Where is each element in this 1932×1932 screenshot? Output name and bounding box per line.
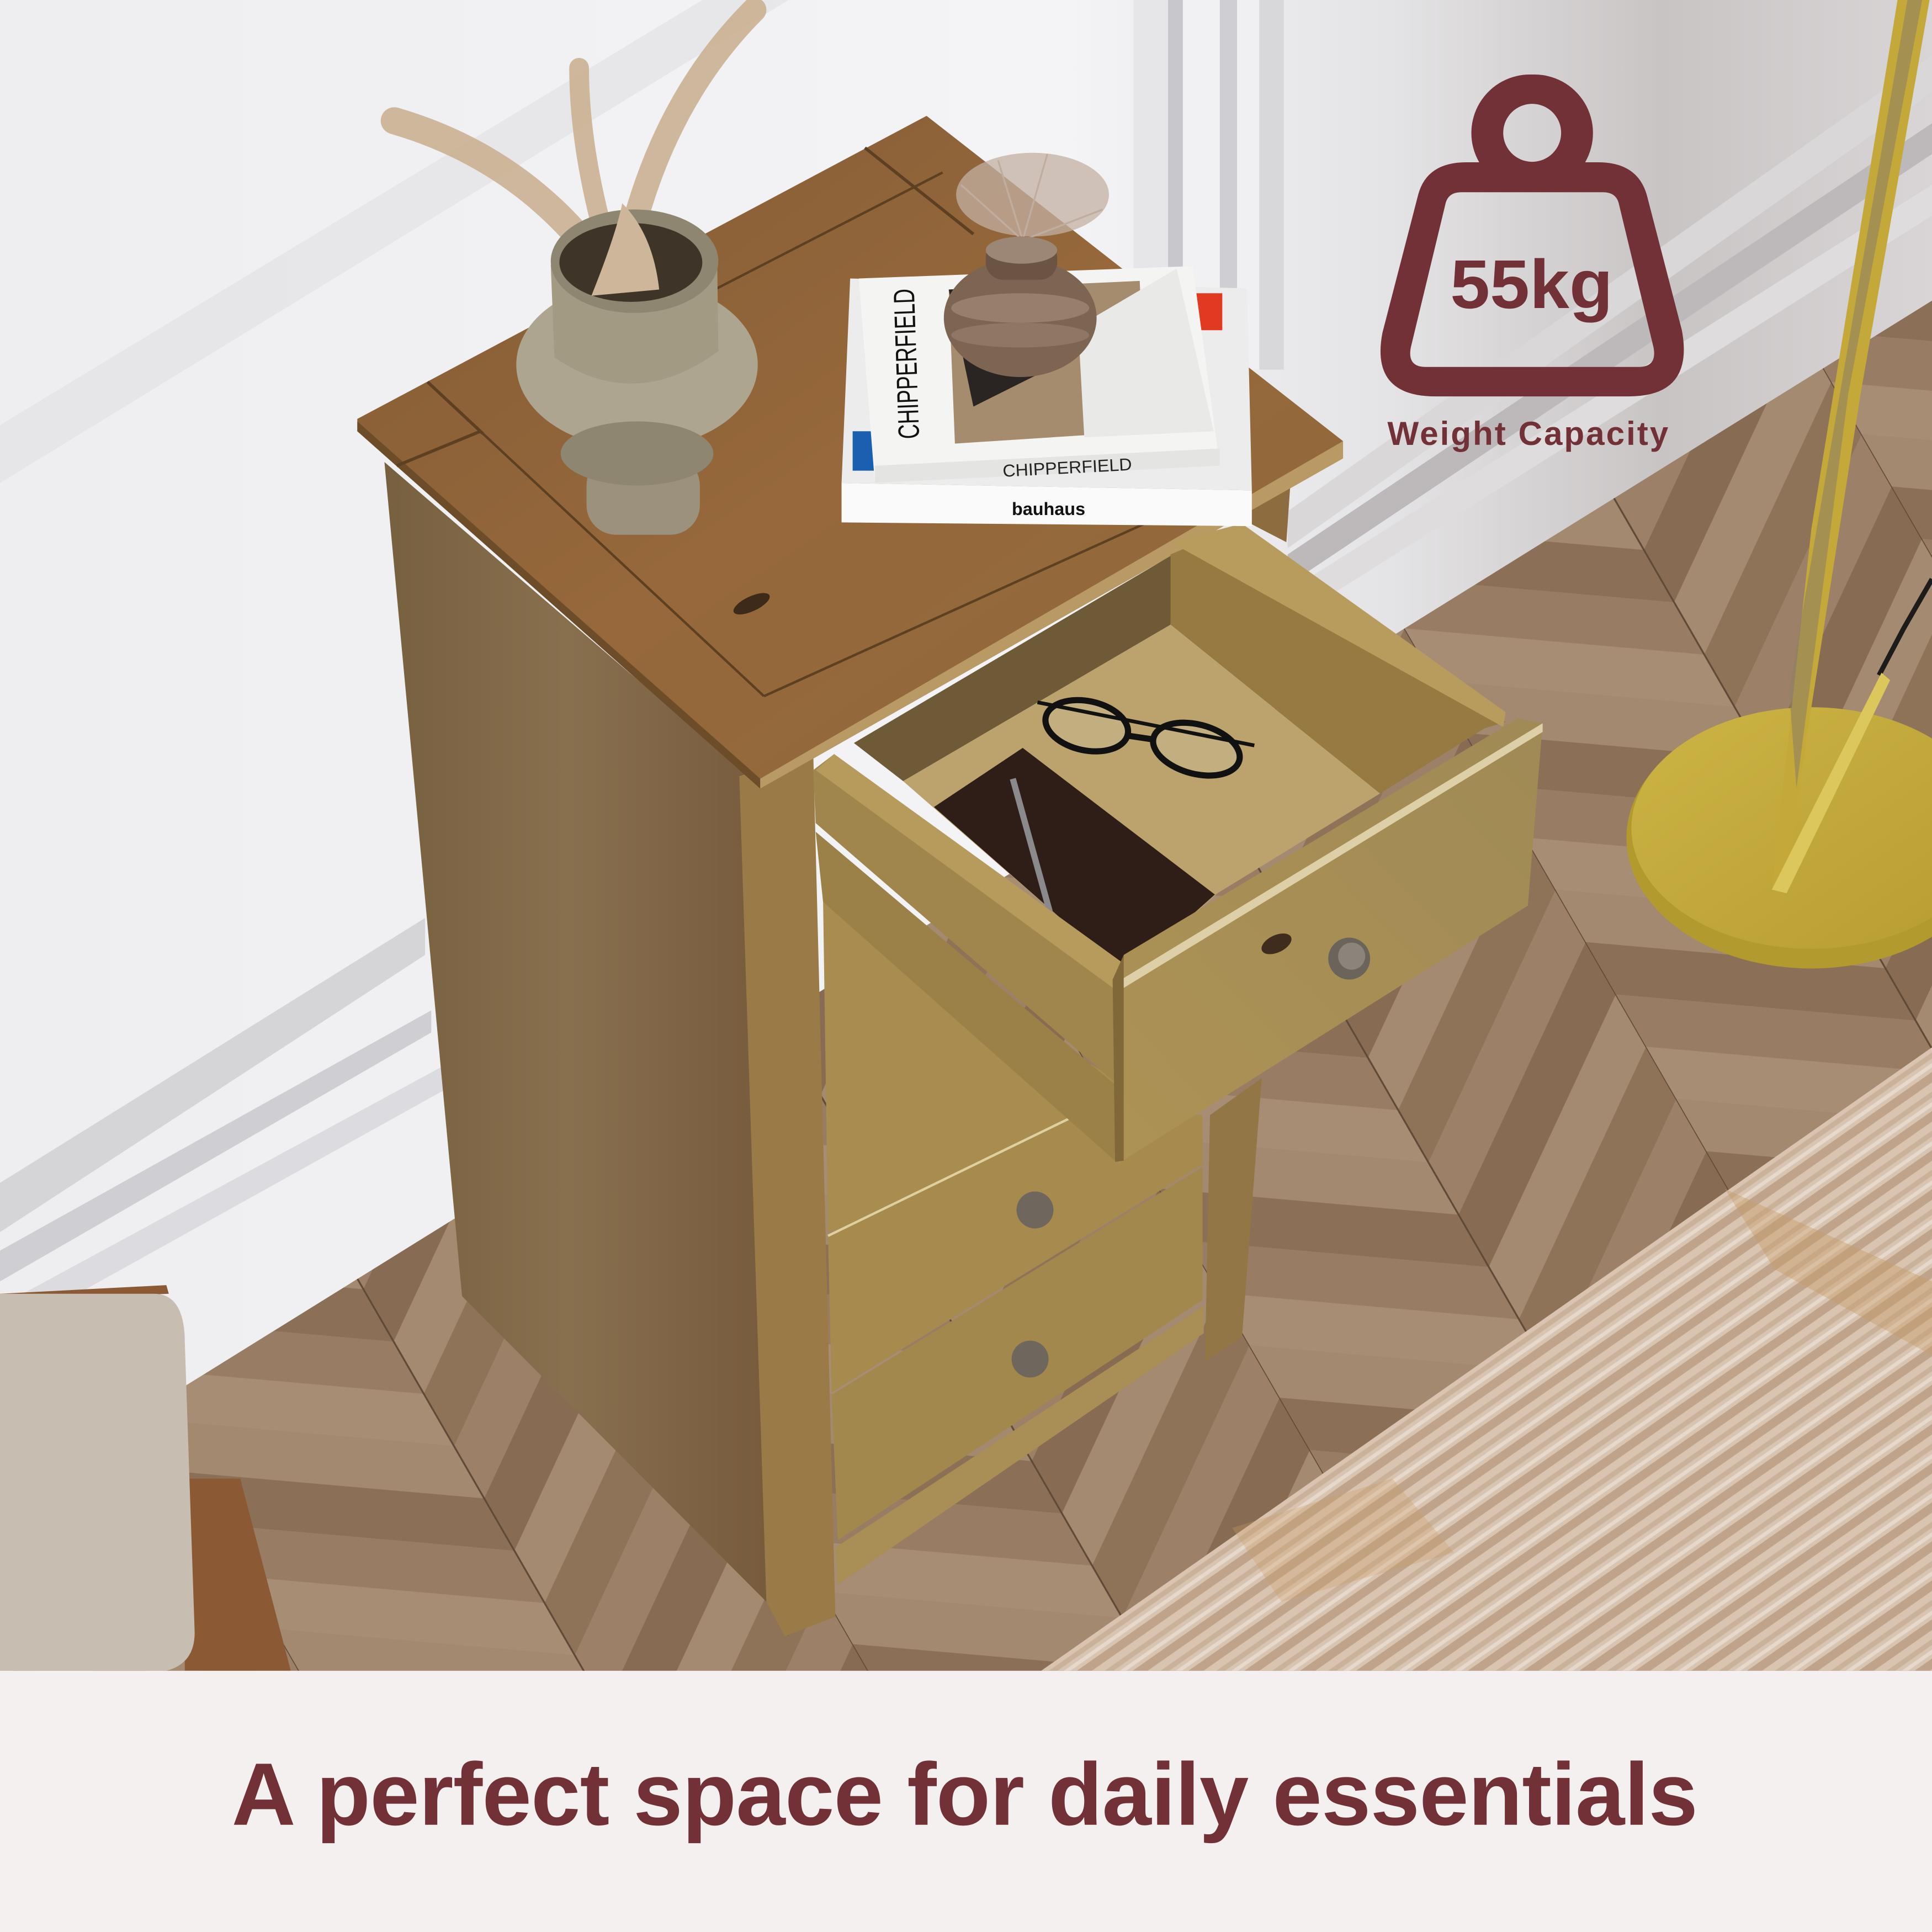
weight label: Weight Capacity bbox=[1387, 415, 1669, 452]
books bbox=[842, 266, 1252, 526]
vase neck bbox=[551, 253, 718, 384]
drawer floor bbox=[903, 625, 1380, 975]
knob bbox=[1017, 1191, 1053, 1228]
rug bbox=[1041, 1047, 1932, 1671]
top book: Chipperfield: CHIPPERFIELD bbox=[888, 288, 926, 439]
bottom book: bauhaus bbox=[842, 278, 1252, 526]
base rail bbox=[835, 1306, 1204, 1585]
vase ring bbox=[516, 281, 758, 448]
cabinet top bbox=[357, 116, 1343, 789]
title: A perfect space for daily essentials bbox=[232, 1745, 1698, 1844]
cabinet side panel bbox=[384, 462, 789, 1636]
cabinet back post bbox=[1205, 1078, 1262, 1362]
notebook bbox=[934, 748, 1215, 975]
cabinet front post bbox=[739, 752, 835, 1636]
glass vase with dried flower bbox=[944, 153, 1109, 377]
top book: Chipperfield: CHIPPERFIELD bbox=[1002, 455, 1132, 481]
vase base bbox=[586, 456, 700, 535]
bottom book: bauhaus: bauhaus bbox=[1012, 499, 1085, 519]
floor lamp bbox=[1626, 0, 1932, 968]
open drawer bbox=[813, 524, 1543, 1163]
bottom caption band bbox=[0, 1671, 1932, 1932]
book cover photo bbox=[949, 281, 1146, 444]
chair bbox=[0, 1285, 291, 1671]
second drawer bbox=[828, 1105, 1203, 1392]
inner front panel bbox=[823, 899, 1124, 1232]
weight icon bbox=[1381, 75, 1684, 396]
cabinet bbox=[357, 116, 1543, 1636]
glasses bbox=[1037, 693, 1254, 784]
knob bbox=[1328, 938, 1370, 980]
weight value: 55kg bbox=[1450, 246, 1613, 323]
drawer runner bbox=[816, 832, 1118, 1162]
drawer right wall bbox=[1171, 524, 1506, 794]
drawer left side bbox=[813, 754, 1124, 1087]
pampas grass bbox=[394, 10, 754, 277]
drawer front bbox=[1119, 718, 1543, 1163]
pen bbox=[1013, 779, 1050, 912]
wall bbox=[0, 0, 1932, 1501]
knob bbox=[1012, 1341, 1049, 1378]
top book: Chipperfield bbox=[859, 266, 1220, 483]
weight capacity icon bbox=[1381, 75, 1684, 452]
drawer back wall bbox=[854, 554, 1173, 781]
decorative vase with pampas grass bbox=[394, 10, 758, 535]
third drawer bbox=[832, 1167, 1203, 1540]
